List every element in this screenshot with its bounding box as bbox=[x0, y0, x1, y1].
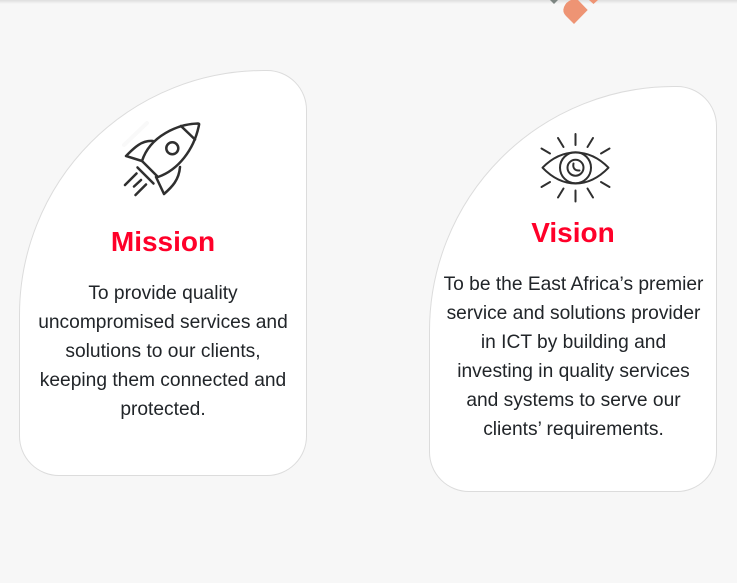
text: vision statement: investing in quality services bbox=[457, 361, 690, 382]
text: mission statement: uncompromised services and bbox=[38, 312, 288, 333]
text: vision statement: in ICT by building and bbox=[481, 332, 666, 353]
text: vision statement: clients’ requirements. bbox=[483, 419, 664, 440]
top bar shadow bbox=[0, 0, 737, 4]
text: mission statement: solutions to our clients, bbox=[65, 341, 261, 362]
panel: mission bbox=[19, 70, 307, 476]
text: vision statement bbox=[444, 274, 704, 440]
text: vision statement: and systems to serve our bbox=[466, 390, 681, 411]
text: mission statement: protected. bbox=[120, 399, 206, 420]
text: mission statement: To provide quality bbox=[88, 283, 238, 304]
text: vision statement: service and solutions provider bbox=[447, 303, 700, 324]
heading: mission: Mission bbox=[111, 226, 215, 257]
text: mission statement bbox=[38, 283, 288, 420]
panel: vision bbox=[429, 86, 717, 492]
text: vision statement: To be the East Africa’s premier bbox=[444, 274, 703, 295]
text: mission statement: keeping them connected and bbox=[40, 370, 286, 391]
heading: vision: Vision bbox=[531, 217, 615, 248]
decorative logo diamonds bbox=[550, 0, 598, 24]
